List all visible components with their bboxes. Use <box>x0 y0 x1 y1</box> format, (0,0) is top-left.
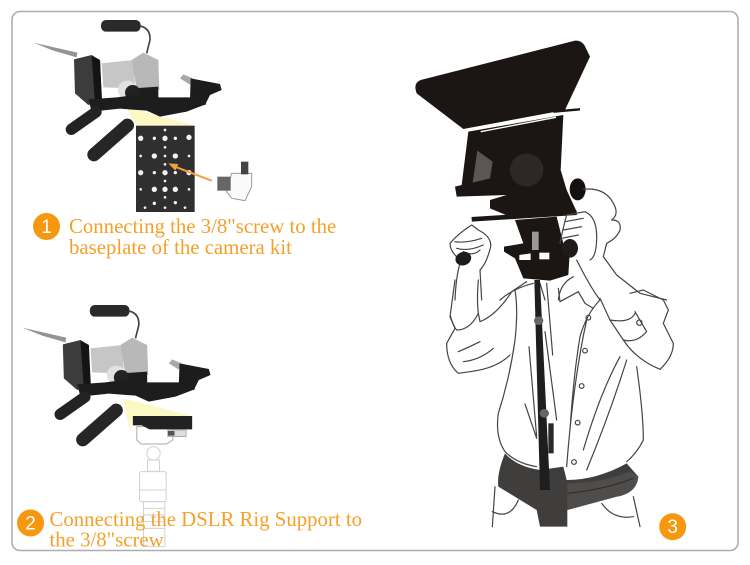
matte box <box>415 41 590 217</box>
rails, knob and mount <box>472 178 586 281</box>
grips <box>454 239 578 268</box>
step 3 illustration: operator wearing the rig <box>415 41 673 527</box>
lower body, pole and belt <box>447 280 673 527</box>
belt with pole holster <box>498 453 638 527</box>
badge 2 <box>17 510 44 536</box>
step 2 illustration: rig on support screw <box>22 305 210 547</box>
badge 3: 3 <box>667 517 678 538</box>
support pole <box>534 280 554 490</box>
highlight wedge <box>126 107 194 125</box>
hands, head and arms <box>450 189 667 300</box>
caption 2: the 3/8"screw <box>50 528 164 552</box>
upper body and rig <box>415 41 667 300</box>
caption 2: Connecting the DSLR Rig Support to <box>50 508 362 531</box>
baseplate with holes <box>136 126 195 212</box>
arrow <box>168 163 212 181</box>
badge 1: 1 <box>41 217 52 238</box>
highlight wedge <box>123 398 192 432</box>
mounting plate and clamp <box>133 416 192 444</box>
step 1 illustration: rig with baseplate and screw <box>33 20 252 212</box>
shirt linework <box>447 280 673 527</box>
badge 2: 2 <box>25 514 36 534</box>
badge 1 <box>33 213 60 240</box>
badge 3 <box>659 513 686 540</box>
screw clamp <box>217 162 252 201</box>
ball-head support screw <box>139 447 166 547</box>
caption 1: Connecting the 3/8"screw to the <box>69 215 336 238</box>
caption 1: baseplate of the camera kit <box>69 236 292 259</box>
